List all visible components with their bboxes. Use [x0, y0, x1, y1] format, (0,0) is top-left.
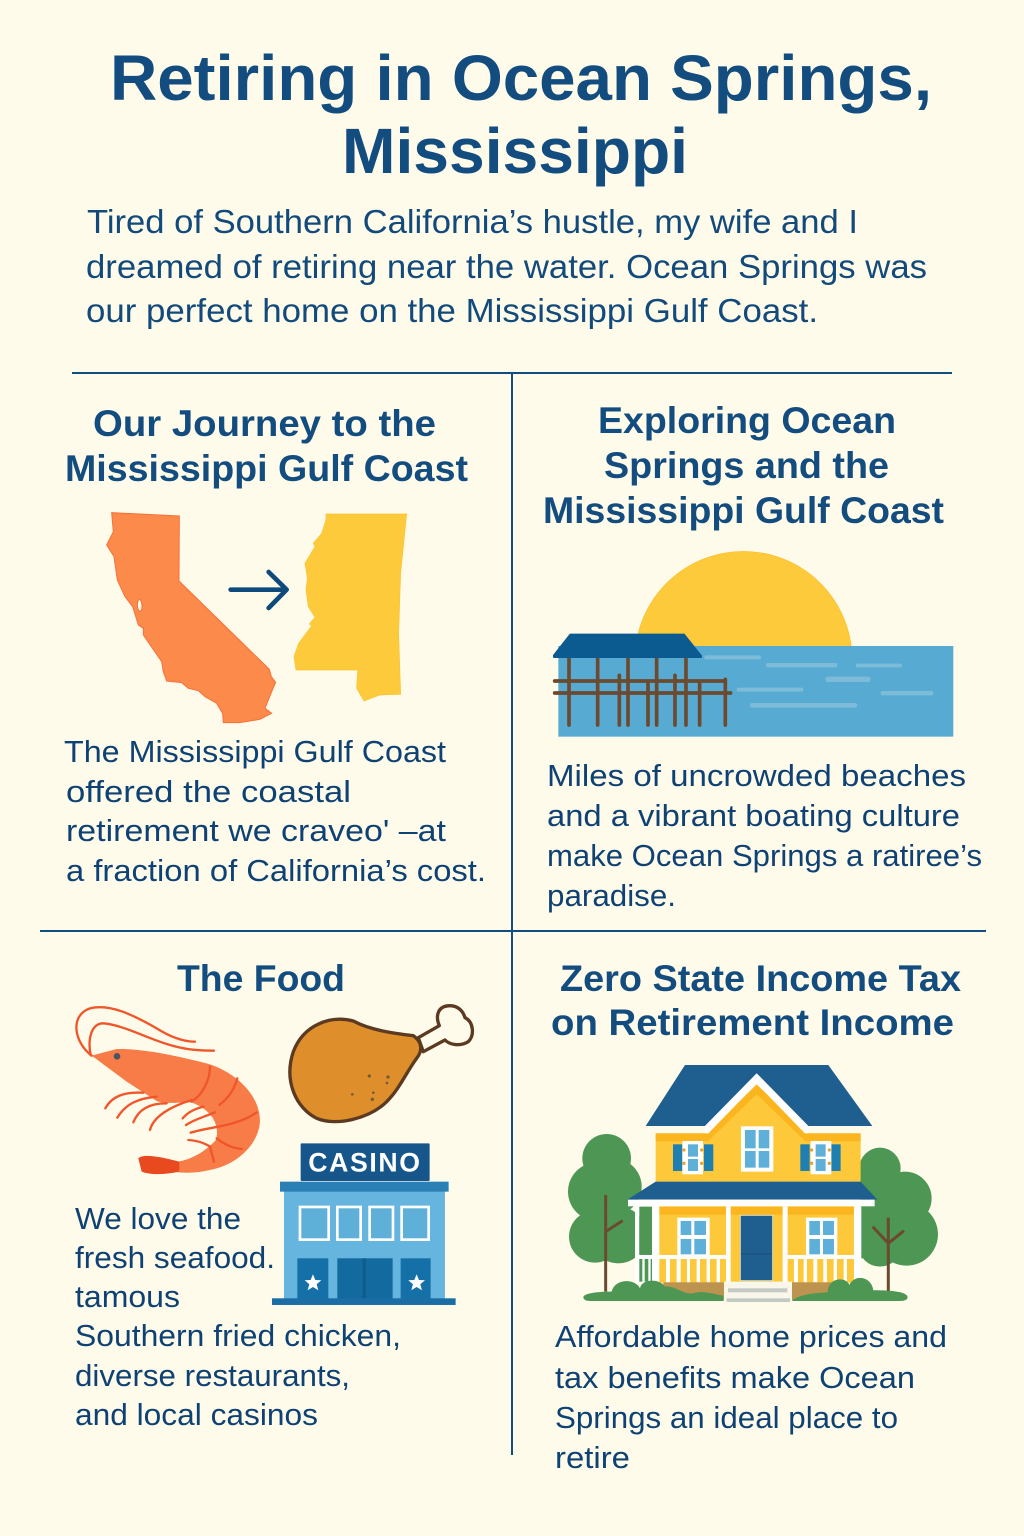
icon: sun	[636, 551, 851, 647]
foundation and steps	[663, 1282, 834, 1302]
text: food: tamous	[75, 1279, 180, 1314]
heading: food: The Food	[177, 958, 345, 999]
text: food: diverse restaurants,	[75, 1358, 350, 1393]
icon: pier	[554, 635, 731, 725]
text: exploring: make Ocean Springs a ratiree’s	[547, 838, 982, 873]
heading: journey: Our Journey to the	[93, 403, 436, 444]
icon: casino	[272, 1143, 456, 1305]
panel: tax	[551, 958, 961, 1475]
text: exploring	[547, 758, 982, 913]
heading: journey	[65, 403, 468, 489]
text: food	[75, 1201, 401, 1432]
porch	[627, 1182, 877, 1283]
heading: exploring: Exploring Ocean	[598, 400, 896, 441]
heading: exploring	[543, 400, 944, 531]
heading: tax: Zero State Income Tax	[560, 958, 961, 999]
intro text: our perfect home on the Mississippi Gulf Coast.	[86, 292, 818, 329]
icon: casino: CASINO	[308, 1148, 420, 1178]
text: journey: a fraction of California’s cost.	[66, 853, 486, 888]
text: tax: Springs an ideal place to	[555, 1400, 898, 1435]
title	[110, 42, 932, 187]
title: Retiring in Ocean Springs,	[110, 42, 932, 114]
panel: food	[75, 958, 472, 1432]
text: journey: offered the coastal	[66, 774, 351, 809]
text: exploring: Miles of uncrowded beaches	[547, 758, 966, 793]
illustration: house	[568, 1065, 938, 1302]
text: tax: tax benefits make Ocean	[555, 1360, 915, 1395]
heading: exploring: Mississippi Gulf Coast	[543, 490, 944, 531]
icon: California	[107, 513, 276, 723]
water	[558, 646, 953, 737]
illustration: food and casino	[76, 1006, 472, 1305]
text: exploring: paradise.	[547, 878, 676, 913]
text: food: We love the	[75, 1201, 241, 1236]
text: journey	[64, 734, 486, 888]
intro text: Tired of Southern California’s hustle, my wife and I	[87, 203, 858, 240]
heading: journey: Mississippi Gulf Coast	[65, 448, 468, 489]
icon: California to Mississippi map	[107, 513, 407, 723]
icon: Mississippi	[294, 514, 407, 701]
intro text	[86, 203, 927, 329]
icon: fried chicken	[290, 1006, 472, 1122]
panel: exploring	[543, 400, 982, 913]
illustration: sunset pier	[554, 551, 953, 737]
panel: journey	[64, 403, 486, 888]
heading: tax: on Retirement Income	[551, 1002, 954, 1043]
text: food: Southern fried chicken,	[75, 1318, 401, 1353]
text: tax: Affordable home prices and	[555, 1319, 947, 1354]
intro text: dreamed of retiring near the water. Ocean Springs was	[86, 248, 927, 285]
text: tax: retire	[555, 1440, 630, 1475]
text: food: fresh seafood.	[75, 1240, 275, 1275]
heading: exploring: Springs and the	[604, 445, 889, 486]
icon: right tree	[858, 1148, 938, 1292]
upper storey	[646, 1065, 872, 1182]
text: food: and local casinos	[75, 1397, 318, 1432]
arrow	[231, 572, 287, 608]
title: Mississippi	[342, 115, 688, 187]
text: journey: retirement we craveo' –at	[66, 813, 446, 848]
text: tax	[555, 1319, 947, 1475]
heading: tax	[551, 958, 961, 1043]
shrubs	[583, 1278, 908, 1301]
text: exploring: and a vibrant boating culture	[547, 798, 960, 833]
text: journey: The Mississippi Gulf Coast	[64, 734, 446, 769]
icon: left tree	[568, 1134, 647, 1292]
icon: shrimp	[76, 1007, 260, 1174]
